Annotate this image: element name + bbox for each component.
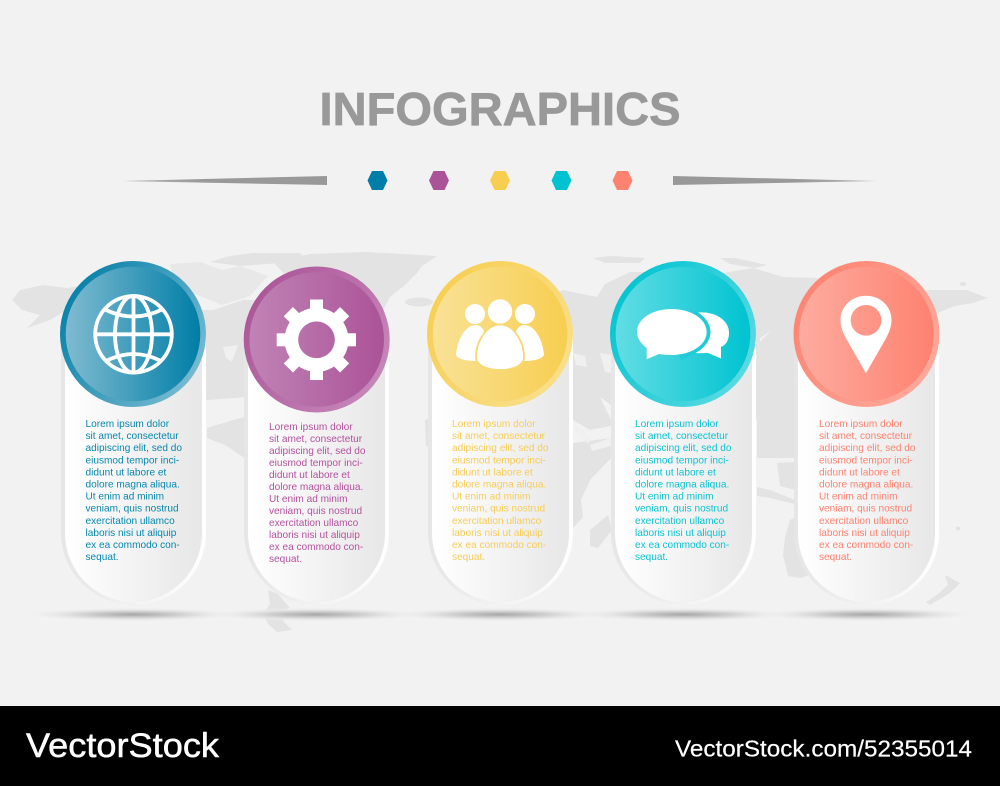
card 4 text: adipiscing elit, sed do: [635, 443, 732, 454]
card 2 body: [244, 340, 389, 605]
card 2 shadow: [204, 608, 428, 622]
footer logo: VectorStock: [26, 727, 220, 765]
card 4 text: didunt ut labore et: [635, 467, 716, 478]
card 1 text: sequat.: [86, 552, 119, 563]
card 3 text: eiusmod tempor inci-: [452, 455, 546, 466]
card 3 shadow: [388, 608, 612, 622]
card 2 text: Lorem ipsum dolor: [269, 422, 353, 433]
card 3 text: adipiscing elit, sed do: [452, 443, 549, 454]
card 4 text: eiusmod tempor inci-: [635, 455, 729, 466]
card 4 text: Ut enim ad minim: [635, 492, 714, 503]
card 1 text: sit amet, consectetur: [86, 431, 179, 442]
card 5 text: laboris nisi ut aliquip: [819, 528, 910, 539]
card 4 text: sit amet, consectetur: [635, 431, 729, 442]
card 4 text: Lorem ipsum dolor: [635, 419, 719, 430]
panel: card 4 cyan: [571, 261, 795, 622]
card 3 text: sequat.: [452, 552, 485, 563]
card 3 text: didunt ut labore et: [452, 467, 533, 478]
card 4 text: veniam, quis nostrud: [635, 504, 728, 515]
card 5 text: sit amet, consectetur: [819, 431, 913, 442]
card 1 text: veniam, quis nostrud: [86, 504, 179, 515]
card 5 text: exercitation ullamco: [819, 516, 909, 527]
card 5 text: didunt ut labore et: [819, 467, 900, 478]
left divider wedge: [122, 176, 327, 185]
card 5 text: veniam, quis nostrud: [819, 504, 912, 515]
card 1 text: Ut enim ad minim: [86, 492, 164, 503]
card 5 text: ex ea commodo con-: [819, 540, 913, 551]
card 3 text: sit amet, consectetur: [452, 431, 546, 442]
card 2 text: veniam, quis nostrud: [269, 506, 362, 517]
panel: card 5 coral: [755, 261, 979, 622]
card 5 text: dolore magna aliqua.: [819, 480, 913, 490]
icon: location pin: [840, 296, 892, 373]
title: INFOGRAPHICS: [320, 83, 680, 135]
card 5 text: adipiscing elit, sed do: [819, 443, 916, 454]
card 2 text: laboris nisi ut aliquip: [269, 530, 360, 541]
card 3 text: ex ea commodo con-: [452, 540, 546, 551]
card 4 text: laboris nisi ut aliquip: [635, 528, 726, 539]
card 4 badge: [610, 261, 756, 407]
card 3 text: exercitation ullamco: [452, 516, 542, 527]
icon: people: [456, 299, 544, 370]
card 5 text: eiusmod tempor inci-: [819, 455, 913, 466]
card 1 text: didunt ut labore et: [86, 467, 167, 478]
card 2 text: exercitation ullamco: [269, 518, 359, 529]
card 4 body: [611, 334, 756, 605]
card 2 text: ex ea commodo con-: [269, 542, 363, 553]
card 1 text: laboris nisi ut aliquip: [86, 528, 177, 539]
card 3 text: veniam, quis nostrud: [452, 504, 545, 515]
card 2 badge: [244, 266, 390, 412]
card 2 text: dolore magna aliqua.: [269, 482, 363, 493]
icon: speech bubbles: [637, 309, 729, 360]
icon: gear: [277, 300, 356, 380]
map inland seas: [223, 330, 772, 451]
card 5 text: Lorem ipsum dolor: [819, 419, 903, 430]
card 3 text: dolore magna aliqua.: [452, 480, 546, 490]
card 1 text: Lorem ipsum dolor: [86, 419, 170, 430]
panel: card 1 blue: [21, 261, 245, 622]
footer image id: VectorStock.com/52355014: [675, 736, 972, 762]
card 5 text: sequat.: [819, 552, 852, 563]
card 3 badge: [427, 261, 573, 407]
card 1 text: exercitation ullamco: [86, 516, 175, 527]
card 1 text: ex ea commodo con-: [86, 540, 180, 551]
card 3 text: Lorem ipsum dolor: [452, 419, 536, 430]
card 5 shadow: [755, 608, 979, 622]
card 3 body: [428, 334, 573, 605]
card 1 text: adipiscing elit, sed do: [86, 443, 182, 454]
card 5 text: Ut enim ad minim: [819, 492, 898, 503]
right divider wedge: [673, 176, 877, 185]
panel: card 3 yellow: [388, 261, 612, 622]
card 2 text: adipiscing elit, sed do: [269, 446, 366, 457]
icon: globe: [95, 296, 172, 373]
card 2 text: sequat.: [269, 554, 302, 565]
card 3 text: Ut enim ad minim: [452, 492, 531, 503]
card 2 text: eiusmod tempor inci-: [269, 458, 363, 469]
card 2 text: didunt ut labore et: [269, 470, 350, 481]
eurasia: [540, 268, 988, 458]
card 4 text: dolore magna aliqua.: [635, 480, 729, 490]
card 2 text: Ut enim ad minim: [269, 494, 348, 505]
hexagon color markers: [368, 171, 632, 190]
panel: card 2 purple: [204, 266, 428, 622]
card 4 text: ex ea commodo con-: [635, 540, 729, 551]
card 1 text: eiusmod tempor inci-: [86, 455, 179, 466]
card 1 badge: [60, 261, 206, 407]
card 5 badge: [794, 261, 940, 407]
footer bar: [0, 706, 1000, 786]
card 1 text: dolore magna aliqua.: [86, 480, 180, 490]
card 4 text: exercitation ullamco: [635, 516, 725, 527]
card 5 body: [794, 334, 939, 605]
card 4 shadow: [571, 608, 795, 622]
card 1 shadow: [21, 608, 245, 622]
card 2 text: sit amet, consectetur: [269, 434, 363, 445]
card 1 body: [61, 334, 206, 605]
card 3 text: laboris nisi ut aliquip: [452, 528, 543, 539]
card 4 text: sequat.: [635, 552, 668, 563]
world map background: [12, 252, 988, 632]
